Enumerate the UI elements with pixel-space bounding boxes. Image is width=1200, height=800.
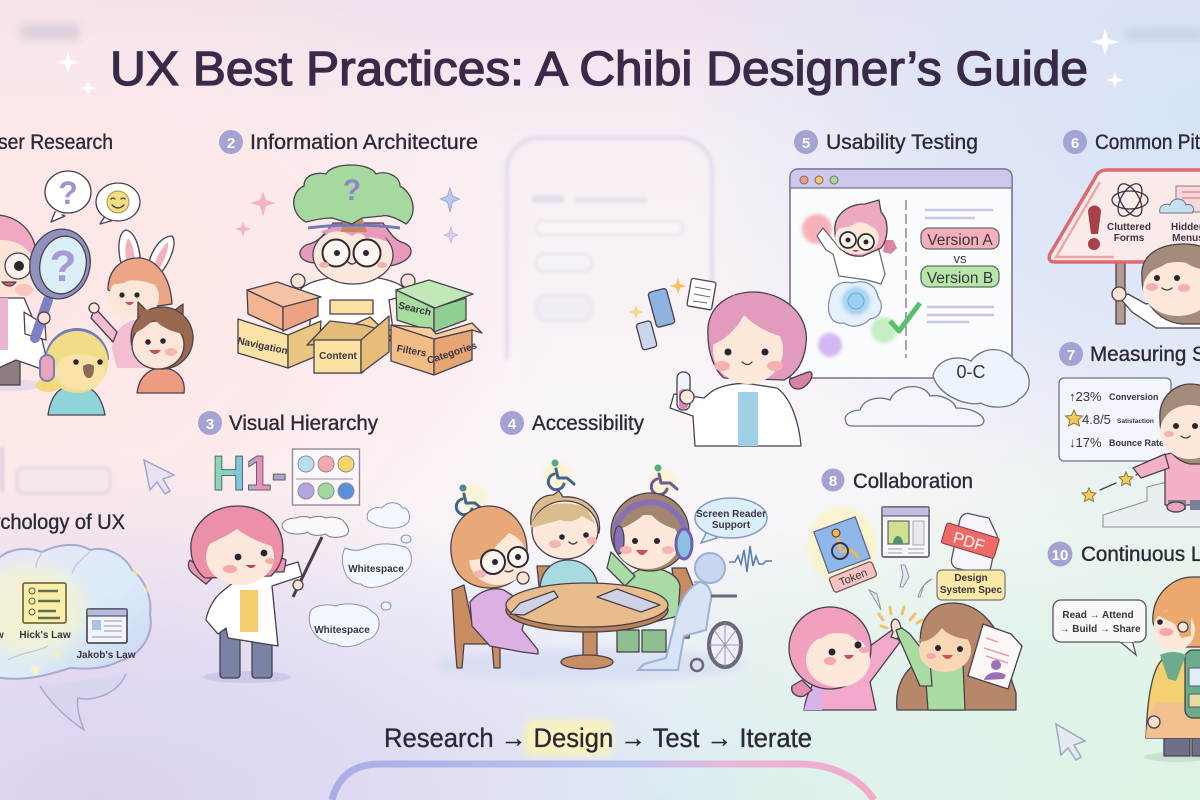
icon: magnifying glass <box>23 224 97 338</box>
version B pill <box>921 266 999 287</box>
icon: browser mockup <box>882 507 929 557</box>
round table with keyboards <box>506 583 668 669</box>
boy on stairs <box>1133 384 1200 512</box>
character: green with headphones <box>607 493 692 652</box>
badge 6 <box>1063 130 1087 154</box>
brain illustration <box>0 545 151 730</box>
metrics card: 4.8/5 <box>1082 412 1111 427</box>
badge 3: 3 <box>206 416 214 433</box>
metrics card: Bounce Rate <box>1109 438 1164 448</box>
box: search green: Search <box>397 300 432 319</box>
icon: tangled form <box>1112 180 1148 220</box>
icons: accessibility symbols <box>456 460 678 515</box>
icon: PDF document: PDF <box>951 530 987 555</box>
version A pill: Version A <box>927 232 993 249</box>
box: navigation: Navigation <box>236 336 289 357</box>
badge 2: 2 <box>227 135 235 152</box>
clouds with whitespace labels: Whitespace <box>314 625 370 636</box>
icon: cursor <box>1056 724 1085 760</box>
scientist with test tube and floating devices <box>629 278 812 446</box>
panel: 8 Collaboration <box>789 468 1022 710</box>
box: salmon closed <box>247 282 321 331</box>
box: content open <box>307 300 392 373</box>
box: navigation <box>236 319 321 368</box>
warning sign: Cluttered <box>1107 222 1151 233</box>
head with hair <box>708 292 812 389</box>
browser window <box>790 169 1029 426</box>
badge 10: 10 <box>1052 547 1068 564</box>
text: research design test iterate: Research → Design → Test → Iterate <box>384 723 812 753</box>
warning sign <box>1049 170 1200 324</box>
warning sign: Forms <box>1114 233 1145 244</box>
box: filters and categories: Categories <box>426 340 479 367</box>
sparkles <box>235 188 460 243</box>
panel: 1 User Research <box>0 131 193 415</box>
speech bubble: question <box>45 171 91 222</box>
metrics card: ↓17% <box>1069 435 1102 450</box>
label: design system spec: System Spec <box>940 585 1003 596</box>
heading: Collaboration: Collaboration <box>853 470 973 493</box>
badge 6: 6 <box>1071 135 1079 152</box>
character: student with backpack <box>1144 577 1200 762</box>
badge 7 <box>1059 342 1083 366</box>
box: filters and categories <box>391 323 482 375</box>
speech bubble: learning path: → Build → Share <box>1059 624 1141 635</box>
panel: 3 Visual Hierarchy <box>144 411 411 683</box>
badge 8: 8 <box>829 473 837 490</box>
label: design system spec: Design <box>954 573 988 584</box>
steps and stars <box>1082 472 1200 527</box>
floor shadow <box>435 649 745 681</box>
boy holding sign <box>1112 244 1200 328</box>
speech bubble: learning path: Read → Attend <box>1062 610 1134 621</box>
panel: 10 Continuous Learning <box>1048 542 1200 762</box>
character: ghost figure in wheelchair <box>638 553 741 671</box>
character: girl with pointer <box>188 506 322 683</box>
sparkles around title <box>56 28 1124 98</box>
character: brown hair girl with document <box>896 603 1022 710</box>
badge 8 <box>822 468 844 492</box>
badge 5 <box>794 130 818 154</box>
panel: 6 Common Pitfalls <box>1049 130 1200 328</box>
icon: token card <box>808 507 877 593</box>
character with tree hat: ? <box>343 174 361 207</box>
icon: PDF document <box>941 512 1001 575</box>
lab coat body <box>670 383 801 446</box>
badge 2 <box>219 130 243 154</box>
label: design system spec <box>937 570 1005 600</box>
box: filters and categories: Filters <box>396 344 428 360</box>
clouds with whitespace labels: Whitespace <box>348 564 404 575</box>
panel: 9 Psychology of UX <box>0 511 1085 760</box>
character: blue sweater boy <box>530 491 600 590</box>
panel: 2 Information Architecture <box>219 130 482 375</box>
heading: Visual Hierarchy: Visual Hierarchy <box>229 412 378 435</box>
icon: check mark <box>890 303 920 331</box>
heading: Accessibility: Accessibility <box>532 412 644 435</box>
clouds <box>845 350 1029 426</box>
highlight: design <box>524 720 612 756</box>
box: content open: Content <box>319 351 358 362</box>
metrics card <box>1059 378 1171 461</box>
badge 4: 4 <box>508 416 517 433</box>
badge 10 <box>1048 542 1072 566</box>
child: yellow hair with headphones <box>36 330 108 415</box>
speech bubble: learning path <box>1053 600 1146 655</box>
version B pill: Version B <box>927 270 993 287</box>
character: orange hair with glasses <box>451 506 538 654</box>
metrics card: ↑23% <box>1069 389 1102 404</box>
clouds: 0-C <box>956 362 986 382</box>
icon: Hick's law list <box>23 583 66 623</box>
box: search green <box>396 280 473 332</box>
vs label: vs <box>954 251 967 266</box>
chairs <box>452 566 694 668</box>
tester character <box>817 200 897 284</box>
badge 4 <box>500 411 524 435</box>
badge 7: 7 <box>1067 347 1075 364</box>
boxes <box>236 280 482 375</box>
brain illustration: Hick's Law <box>19 630 71 641</box>
arc under flow <box>332 764 874 800</box>
icon: magnifying glass: ? <box>50 242 76 291</box>
floating devices <box>629 278 716 350</box>
badge 3 <box>198 411 222 435</box>
panel: 4 Accessibility <box>435 411 772 681</box>
speech bubble: smiley <box>96 183 140 224</box>
process flow <box>332 720 874 800</box>
heatmap blobs <box>802 214 897 357</box>
speech bubble: screen reader support: Support <box>712 520 751 531</box>
arrows to handshake <box>869 565 932 610</box>
H1 type specimen: H1- <box>212 447 287 501</box>
child: cat ears <box>131 302 193 393</box>
speech bubble: screen reader support <box>695 498 767 543</box>
version A pill <box>921 228 999 249</box>
speech bubble: question: ? <box>58 175 78 211</box>
child: bunny ears <box>89 230 174 368</box>
heading: Usability Testing: Usability Testing <box>826 131 978 154</box>
speech bubble: screen reader support: Screen Reader <box>696 509 766 520</box>
spark lines <box>879 607 922 628</box>
decorative ghost UI background <box>0 24 1200 493</box>
scene: researcher with magnifier and children <box>0 171 193 415</box>
panel: 7 Measuring Success <box>1059 342 1200 527</box>
character with tree hat <box>291 165 415 330</box>
character: pink girl high-five <box>789 607 901 710</box>
badge 5: 5 <box>802 135 810 152</box>
icon: cursor <box>144 460 174 494</box>
icon: Jakob's law browser <box>87 609 127 643</box>
metrics card: Satisfaction <box>1117 418 1154 425</box>
icon: sound wave <box>729 546 772 572</box>
clouds with whitespace labels <box>282 503 411 647</box>
title: UX Best Practices: A Chibi Designer’s Guide <box>110 43 1088 96</box>
metrics card: Conversion <box>1109 392 1159 402</box>
heading: Information Architecture: Information Architecture <box>250 131 478 154</box>
colour palette card <box>292 449 360 505</box>
brain illustration: Jakob's Law <box>76 650 136 661</box>
panel: 5 Usability Testing <box>790 130 1029 426</box>
icon: cloud hiding menu <box>1160 186 1200 213</box>
test tube <box>677 372 694 410</box>
icon: token card: Token <box>838 567 869 589</box>
